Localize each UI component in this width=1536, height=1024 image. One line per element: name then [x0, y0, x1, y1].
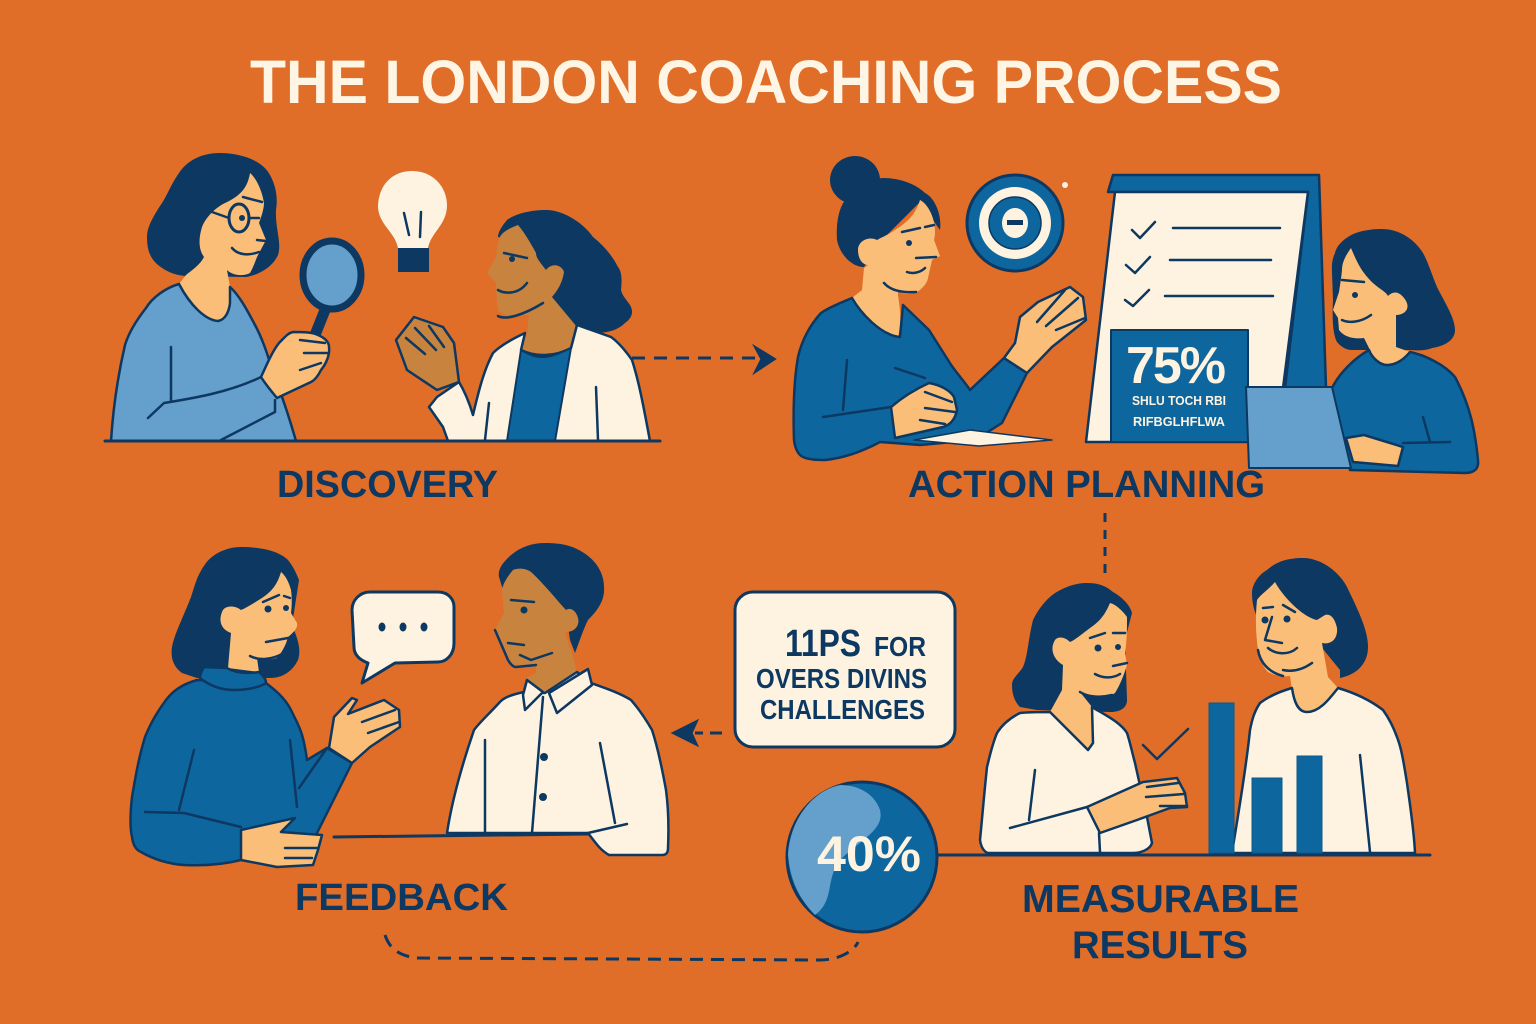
panel: action planning — [794, 156, 1478, 506]
label: feedback: FEEDBACK — [295, 877, 509, 919]
arrow: measurable results to feedback — [674, 722, 722, 744]
label: measurable results — [1022, 878, 1299, 967]
person: woman with laptop — [1246, 229, 1478, 473]
person: woman with magnifying glass — [111, 153, 296, 441]
arrow: discovery to action planning — [632, 348, 774, 371]
person: woman in white coat — [396, 210, 650, 441]
panel: measurable results — [787, 558, 1430, 967]
callout: tips card: FOR — [874, 631, 926, 662]
label: measurable results: RESULTS — [1072, 924, 1248, 967]
chart board with checklist — [1086, 175, 1326, 442]
callout: tips card: OVERS DIVINS — [756, 663, 927, 694]
person: woman with checkmark — [980, 583, 1188, 853]
icon: light bulb — [378, 171, 447, 272]
person: woman in sweater — [130, 547, 400, 867]
stat box 75% — [1111, 330, 1248, 442]
bar chart — [1209, 703, 1322, 853]
stat box 75%: SHLU TOCH RBI — [1132, 393, 1226, 408]
stat box 75%: 75% — [1126, 337, 1226, 395]
baseline — [105, 440, 660, 442]
panel: feedback — [130, 543, 668, 919]
callout: tips card: 11PS — [785, 623, 861, 665]
panel: discovery — [105, 153, 660, 506]
person: man in white shirt — [447, 543, 668, 855]
icon: target badge — [967, 175, 1068, 271]
icon: magnifying glass — [261, 241, 361, 398]
person: woman beside bar chart — [1232, 558, 1415, 853]
callout: tips card — [735, 592, 955, 747]
stat circle 40%: 40% — [817, 826, 921, 882]
stat box 75%: RIFBGLHFLWA — [1133, 414, 1226, 429]
arrow: action planning to measurable results — [1104, 513, 1106, 578]
icon: speech bubble — [352, 592, 454, 683]
title: THE LONDON COACHING PROCESS — [250, 48, 1282, 116]
label: measurable results: MEASURABLE — [1022, 878, 1299, 921]
desk line — [334, 834, 588, 837]
callout: tips card: CHALLENGES — [760, 694, 925, 725]
label: discovery: DISCOVERY — [277, 464, 498, 506]
label: action planning: ACTION PLANNING — [908, 464, 1265, 506]
person: woman with hair bun — [794, 156, 1086, 460]
arrow: feedback loop dashed — [385, 935, 858, 960]
baseline — [938, 854, 1430, 856]
stat circle 40% — [787, 782, 937, 932]
